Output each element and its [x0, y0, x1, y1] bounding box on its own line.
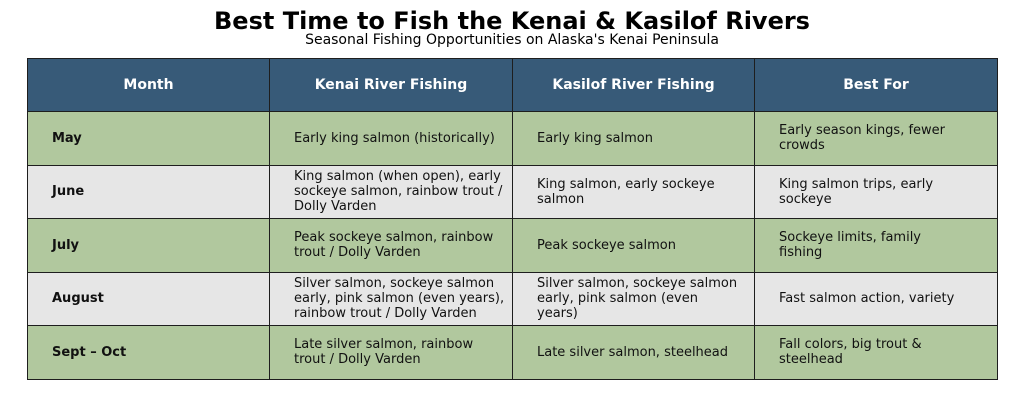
- table: fishing calendar: June: [52, 184, 84, 199]
- table: fishing calendar: trout / Dolly Varden: [294, 245, 421, 260]
- table: fishing calendar: Silver salmon, sockeye salmon: [537, 276, 737, 291]
- table: fishing calendar: King salmon (when open), early: [294, 169, 501, 184]
- table: fishing calendar: salmon: [537, 192, 584, 207]
- table: fishing calendar: early, pink salmon (even years),: [294, 291, 504, 306]
- table: fishing calendar: King salmon trips, early: [779, 177, 933, 192]
- table: fishing calendar: Fast salmon action, variety: [779, 291, 954, 306]
- table: fishing calendar: [27, 58, 998, 380]
- table: fishing calendar: Early season kings, fewer: [779, 123, 945, 138]
- table: fishing calendar: steelhead: [779, 352, 843, 367]
- table: fishing calendar: Fall colors, big trout &: [779, 337, 922, 352]
- table: fishing calendar: May: [52, 131, 82, 146]
- table: fishing calendar: rainbow trout / Dolly Varden: [294, 306, 477, 321]
- table: fishing calendar: Best For: [843, 76, 909, 92]
- table: fishing calendar: trout / Dolly Varden: [294, 352, 421, 367]
- table: fishing calendar: sockeye salmon, rainbow trout /: [294, 184, 502, 199]
- table: fishing calendar: Month: [123, 76, 174, 92]
- table: fishing calendar: sockeye: [779, 192, 832, 207]
- table: fishing calendar: Early king salmon (historically): [294, 131, 495, 146]
- table: fishing calendar: Kenai River Fishing: [315, 76, 467, 92]
- table: fishing calendar: King salmon, early sockeye: [537, 177, 715, 192]
- table: fishing calendar: Sockeye limits, family: [779, 230, 921, 245]
- table: fishing calendar: Peak sockeye salmon: [537, 238, 676, 253]
- table: fishing calendar: July: [52, 238, 79, 253]
- table: fishing calendar: Sept – Oct: [52, 345, 126, 360]
- subtitle: Seasonal Fishing Opportunities on Alaska's Kenai Peninsula: [305, 32, 719, 48]
- table: fishing calendar: crowds: [779, 138, 825, 153]
- table: fishing calendar: Late silver salmon, rainbow: [294, 337, 473, 352]
- table: fishing calendar: Peak sockeye salmon, rainbow: [294, 230, 493, 245]
- title: Best Time to Fish the Kenai & Kasilof Rivers: [214, 7, 810, 35]
- table: fishing calendar: fishing: [779, 245, 822, 260]
- table: fishing calendar: Late silver salmon, steelhead: [537, 345, 728, 360]
- table: fishing calendar: Early king salmon: [537, 131, 653, 146]
- table: fishing calendar: Dolly Varden: [294, 199, 376, 214]
- table: fishing calendar: early, pink salmon (even: [537, 291, 698, 306]
- table: fishing calendar: Kasilof River Fishing: [552, 76, 715, 92]
- table: fishing calendar: Silver salmon, sockeye salmon: [294, 276, 494, 291]
- table: fishing calendar: August: [52, 291, 104, 306]
- table: fishing calendar: years): [537, 306, 578, 321]
